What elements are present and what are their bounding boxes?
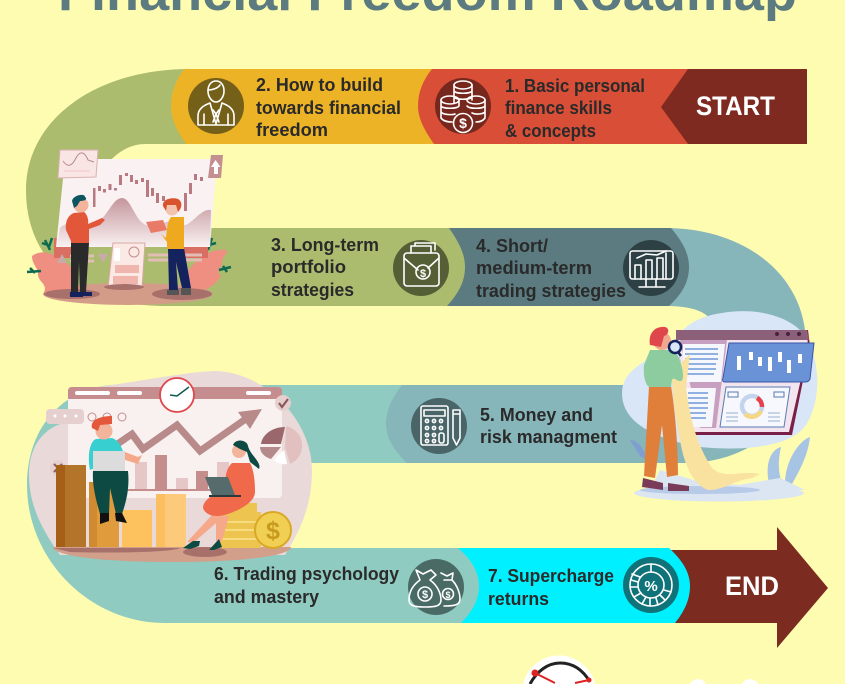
icon: chart monitor [623,240,679,296]
icon: briefcase: $ [420,268,426,280]
shadows [44,289,100,299]
step 6 text: and mastery [214,587,319,607]
start arrow [661,69,807,144]
coins [217,503,291,548]
mountain chart [57,198,211,247]
pie chart [260,426,302,464]
bar chart [125,455,235,491]
coins: $ [266,517,280,545]
icon: calculator and pencil [411,398,467,454]
step 6 text: 6. Trading psychology [214,564,399,584]
donut panel [720,387,790,427]
blob [622,311,817,448]
step 3 content [271,235,449,300]
start arrow: START [696,91,775,121]
text cards [683,344,725,427]
icon: percent gauge [623,557,679,613]
step 2 text: freedom [256,120,328,140]
monitor [676,330,810,435]
illustration: two people with candlestick board [27,150,231,305]
up arrow card [208,155,223,178]
step 2 banner [171,69,440,144]
person with red hair [146,198,191,295]
step 5 text [480,405,617,447]
end arrow [660,527,828,648]
step 5 text: 5. Money and [480,405,593,425]
end arrow: END [725,571,779,601]
step 6 content [214,559,464,615]
step 3 text: portfolio [271,257,346,277]
3d bars [56,465,186,547]
step 1 text: & concepts [505,121,596,141]
partner mark fragments at bottom [690,679,758,684]
step 2 text [256,75,401,140]
whiteboard [56,159,217,247]
blob [29,371,312,555]
woman with laptop [183,441,259,550]
step 1 banner [418,69,700,144]
step 7 text: 7. Supercharge [488,566,614,586]
icon: briefcase [393,240,449,296]
step 7 text [488,566,614,609]
icon: percent gauge: % [644,578,658,595]
step 5 text: risk managment [480,427,617,447]
step 4 text: trading strategies [476,281,626,301]
step 5 content [411,398,617,454]
x and check badges [50,395,291,476]
logo fragment at bottom [523,656,595,684]
step 2 text: towards financial [256,98,401,118]
paper roll [672,354,760,490]
step 7 banner [458,548,690,623]
step 1 text: 1. Basic personal [505,76,645,96]
step 7 text: returns [488,589,549,609]
step 6 text [214,564,399,607]
growth arrow [116,409,262,451]
sprigs [27,238,231,273]
icon: money bags: $ [445,590,451,600]
icon: coin stacks: $ [459,115,467,131]
plants [768,437,810,484]
speech bubble [46,409,126,424]
illustration: two people with growth chart [29,371,312,562]
step 1 text: finance skills [505,98,612,118]
step 4 text: 4. Short/ [476,236,548,256]
road: right teal curve [500,228,806,463]
step 2 text: 2. How to build [256,75,383,95]
candlesticks [93,173,203,211]
illustration: analyst with dashboard [622,311,817,502]
step 4 text [476,236,626,301]
small line chart card [58,150,98,178]
icon: money bags: $ [422,589,428,601]
step 4 text: medium-term [476,258,592,278]
step 4 banner [447,228,689,306]
step 3 text: 3. Long-term [271,235,379,255]
icon: businessman [188,78,244,134]
road: upper green curve and step 3 band [26,69,500,306]
page card and chips [57,243,202,288]
clock [160,378,194,412]
icon: coin stacks [435,78,491,134]
leaves [32,250,227,296]
person with magnifier [642,327,689,491]
ground [43,283,213,305]
step 1 text [505,76,645,141]
road: lower left teal curve and step 6 band [27,385,500,623]
ground [53,547,291,562]
ground [634,484,804,502]
person with green hair [66,195,105,297]
step 5 band cap [386,385,640,463]
step 3 text [271,235,379,300]
icon: money bags [408,559,464,615]
man with laptop [89,416,142,524]
browser window [68,387,282,498]
candlestick panel [723,343,814,382]
red bands behind board [54,238,208,258]
step 3 text: strategies [271,280,354,300]
